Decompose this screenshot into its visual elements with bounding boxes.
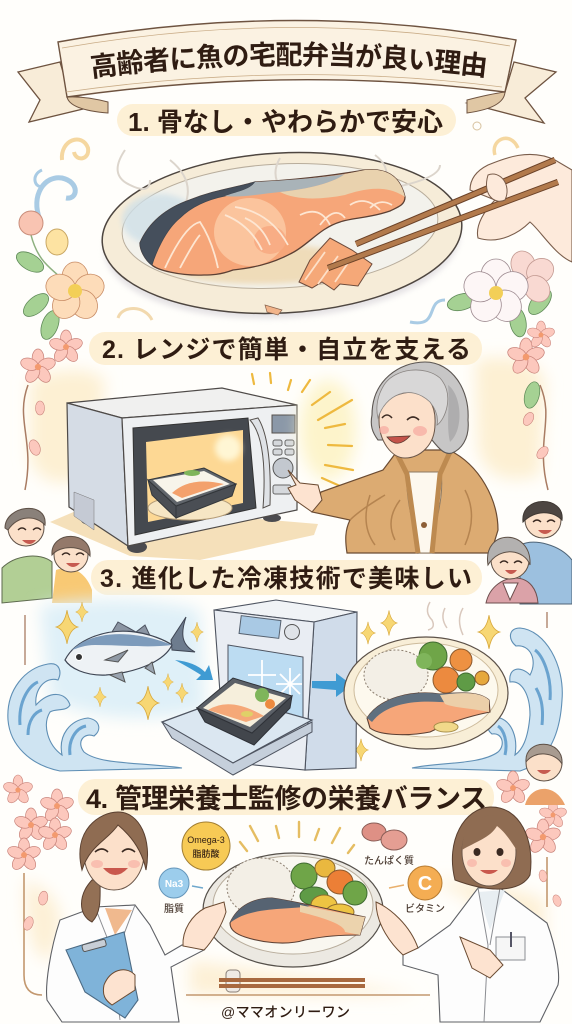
- meal tray: [197, 696, 292, 745]
- hands: [376, 902, 418, 955]
- cherry blossoms and frame, section 4: [2, 771, 568, 995]
- hair: [452, 807, 531, 889]
- hair: [371, 362, 468, 453]
- family right: [486, 501, 572, 604]
- nutrient icon: vitamin C: [389, 866, 445, 915]
- raised hand: [183, 902, 226, 950]
- plate with salmon: [98, 144, 466, 327]
- dietitian right: [376, 807, 559, 1022]
- heading 2: 2. レンジで簡単・自立を支える: [102, 336, 471, 364]
- decorative swirls and flowers left: [13, 139, 152, 342]
- balanced meal plate: [203, 822, 383, 967]
- open door: [162, 697, 312, 763]
- heading 3: 3. 進化した冷凍技術で美味しい: [100, 565, 472, 593]
- chopsticks and rest: [219, 970, 365, 992]
- blue watercolour wash: [25, 600, 547, 718]
- steam: [118, 150, 440, 205]
- nutrient icon: protein: [362, 823, 414, 867]
- pointing hand: [288, 470, 322, 512]
- finished meal plate: [344, 637, 508, 749]
- blue arrows: [175, 660, 352, 697]
- small grandmother: [525, 744, 565, 805]
- radiating glow lines: [252, 373, 356, 486]
- title ribbon banner: [16, 20, 558, 124]
- dietitian left: [47, 812, 226, 1022]
- nutrient icon: fat: Na3: [165, 879, 184, 890]
- author credit: @ママオンリーワン: [221, 1004, 350, 1020]
- salmon skin: [140, 182, 255, 265]
- nutrient icon: fat: 脂質: [164, 902, 184, 915]
- nutrient icon: omega-3: 脂肪酸: [192, 848, 220, 859]
- ocean wave left: [8, 664, 182, 771]
- food tray: [148, 496, 232, 520]
- decorative swirls and flowers right: [410, 122, 558, 338]
- nutrient icon: protein: たんぱく質: [364, 854, 414, 867]
- smiling grandmother: [288, 362, 498, 553]
- freezer appliance: [162, 600, 357, 775]
- title text: 高齢者に魚の宅配弁当が良い理由: [90, 41, 486, 79]
- heading 1: 1. 骨なし・やわらかで安心: [128, 107, 443, 137]
- family left: [2, 508, 92, 603]
- heading 4: 4. 管理栄養士監修の栄養バランス: [86, 784, 487, 814]
- hand with chopsticks: [328, 154, 572, 268]
- flaked salmon piece: [299, 238, 372, 290]
- sparkles: [56, 602, 500, 761]
- nutrient icon: fat: [159, 868, 203, 915]
- ponytail: [82, 880, 100, 922]
- table: [50, 505, 318, 560]
- nutrient icon: vitamin C: ビタミン: [405, 902, 445, 915]
- nutrient icon: omega-3: Omega-3: [187, 835, 225, 845]
- tuna fish: [65, 617, 195, 682]
- watercolour wash and cherry blossoms, section 2: [19, 321, 556, 490]
- clipboard: [66, 932, 138, 1018]
- salmon steak: [140, 170, 405, 275]
- microwave oven: [50, 388, 318, 560]
- ocean wave right: [412, 628, 562, 771]
- nutrient icon: omega-3: [182, 822, 230, 870]
- nutrient icon: vitamin C: C: [418, 873, 432, 895]
